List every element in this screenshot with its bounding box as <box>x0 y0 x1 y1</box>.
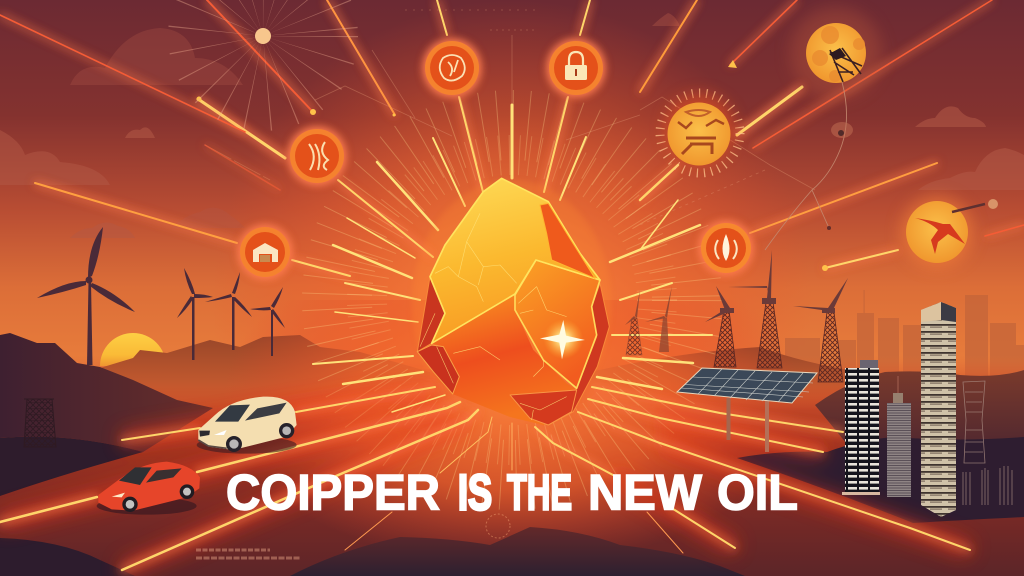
starburst top left <box>213 0 313 86</box>
rock base glow <box>412 180 612 427</box>
faint network lines <box>205 10 815 225</box>
skyscraper: tall cream <box>921 302 956 517</box>
lattice turbines right <box>705 250 848 382</box>
left wind turbines <box>37 227 285 365</box>
bottom red facet <box>510 390 577 425</box>
pale rays near the rock <box>313 105 712 553</box>
dark foreground hills <box>0 437 1024 576</box>
red haze under road lines <box>0 387 970 570</box>
left red facet <box>417 277 445 352</box>
sun on the horizon <box>100 333 166 366</box>
right red facet <box>548 283 609 425</box>
title <box>226 464 798 520</box>
icon: sun face with pipes <box>660 93 740 173</box>
distant city skyline <box>785 290 1024 380</box>
sparkle star <box>540 319 585 359</box>
title: COIPPER <box>226 464 440 520</box>
red car <box>97 462 200 515</box>
title: OIL <box>717 464 798 520</box>
icon: circuit swirl <box>425 41 479 95</box>
thin tether line with balloon <box>765 82 853 250</box>
title: THE <box>507 464 572 520</box>
inner fold <box>540 203 595 278</box>
small lattice turbines centre right <box>625 286 672 355</box>
cream car <box>197 397 297 454</box>
thin radial rays behind rock <box>337 125 687 475</box>
lower left dark facet <box>417 345 459 394</box>
top yellow facet <box>430 178 600 343</box>
icon: moon with oil derrick <box>790 7 882 99</box>
distant hills <box>0 333 1024 460</box>
ground glow <box>0 300 1024 576</box>
arrow tips <box>196 60 828 271</box>
cracks <box>420 213 567 420</box>
faint ring emblem <box>486 514 510 538</box>
illegible small print <box>196 550 301 558</box>
icon: house <box>240 227 290 277</box>
right orange facet <box>515 260 600 388</box>
clouds <box>0 13 1024 238</box>
icon: red bird orb <box>901 196 998 268</box>
copper rock nugget <box>412 178 612 427</box>
icon: flame <box>701 223 751 273</box>
left pylon <box>24 399 56 447</box>
skyscraper: outline and small towers <box>963 381 1012 505</box>
solar panel <box>677 368 817 452</box>
skyscraper: grey <box>887 376 911 497</box>
title: IS <box>458 464 492 520</box>
title: NEW <box>588 464 703 520</box>
centre lower facet <box>432 293 577 425</box>
red laser lines <box>0 0 1024 236</box>
skyscraper: black striped <box>842 360 880 495</box>
icon: copper strands <box>290 129 344 183</box>
ground plane <box>0 355 1024 576</box>
icon: padlock <box>549 41 603 95</box>
